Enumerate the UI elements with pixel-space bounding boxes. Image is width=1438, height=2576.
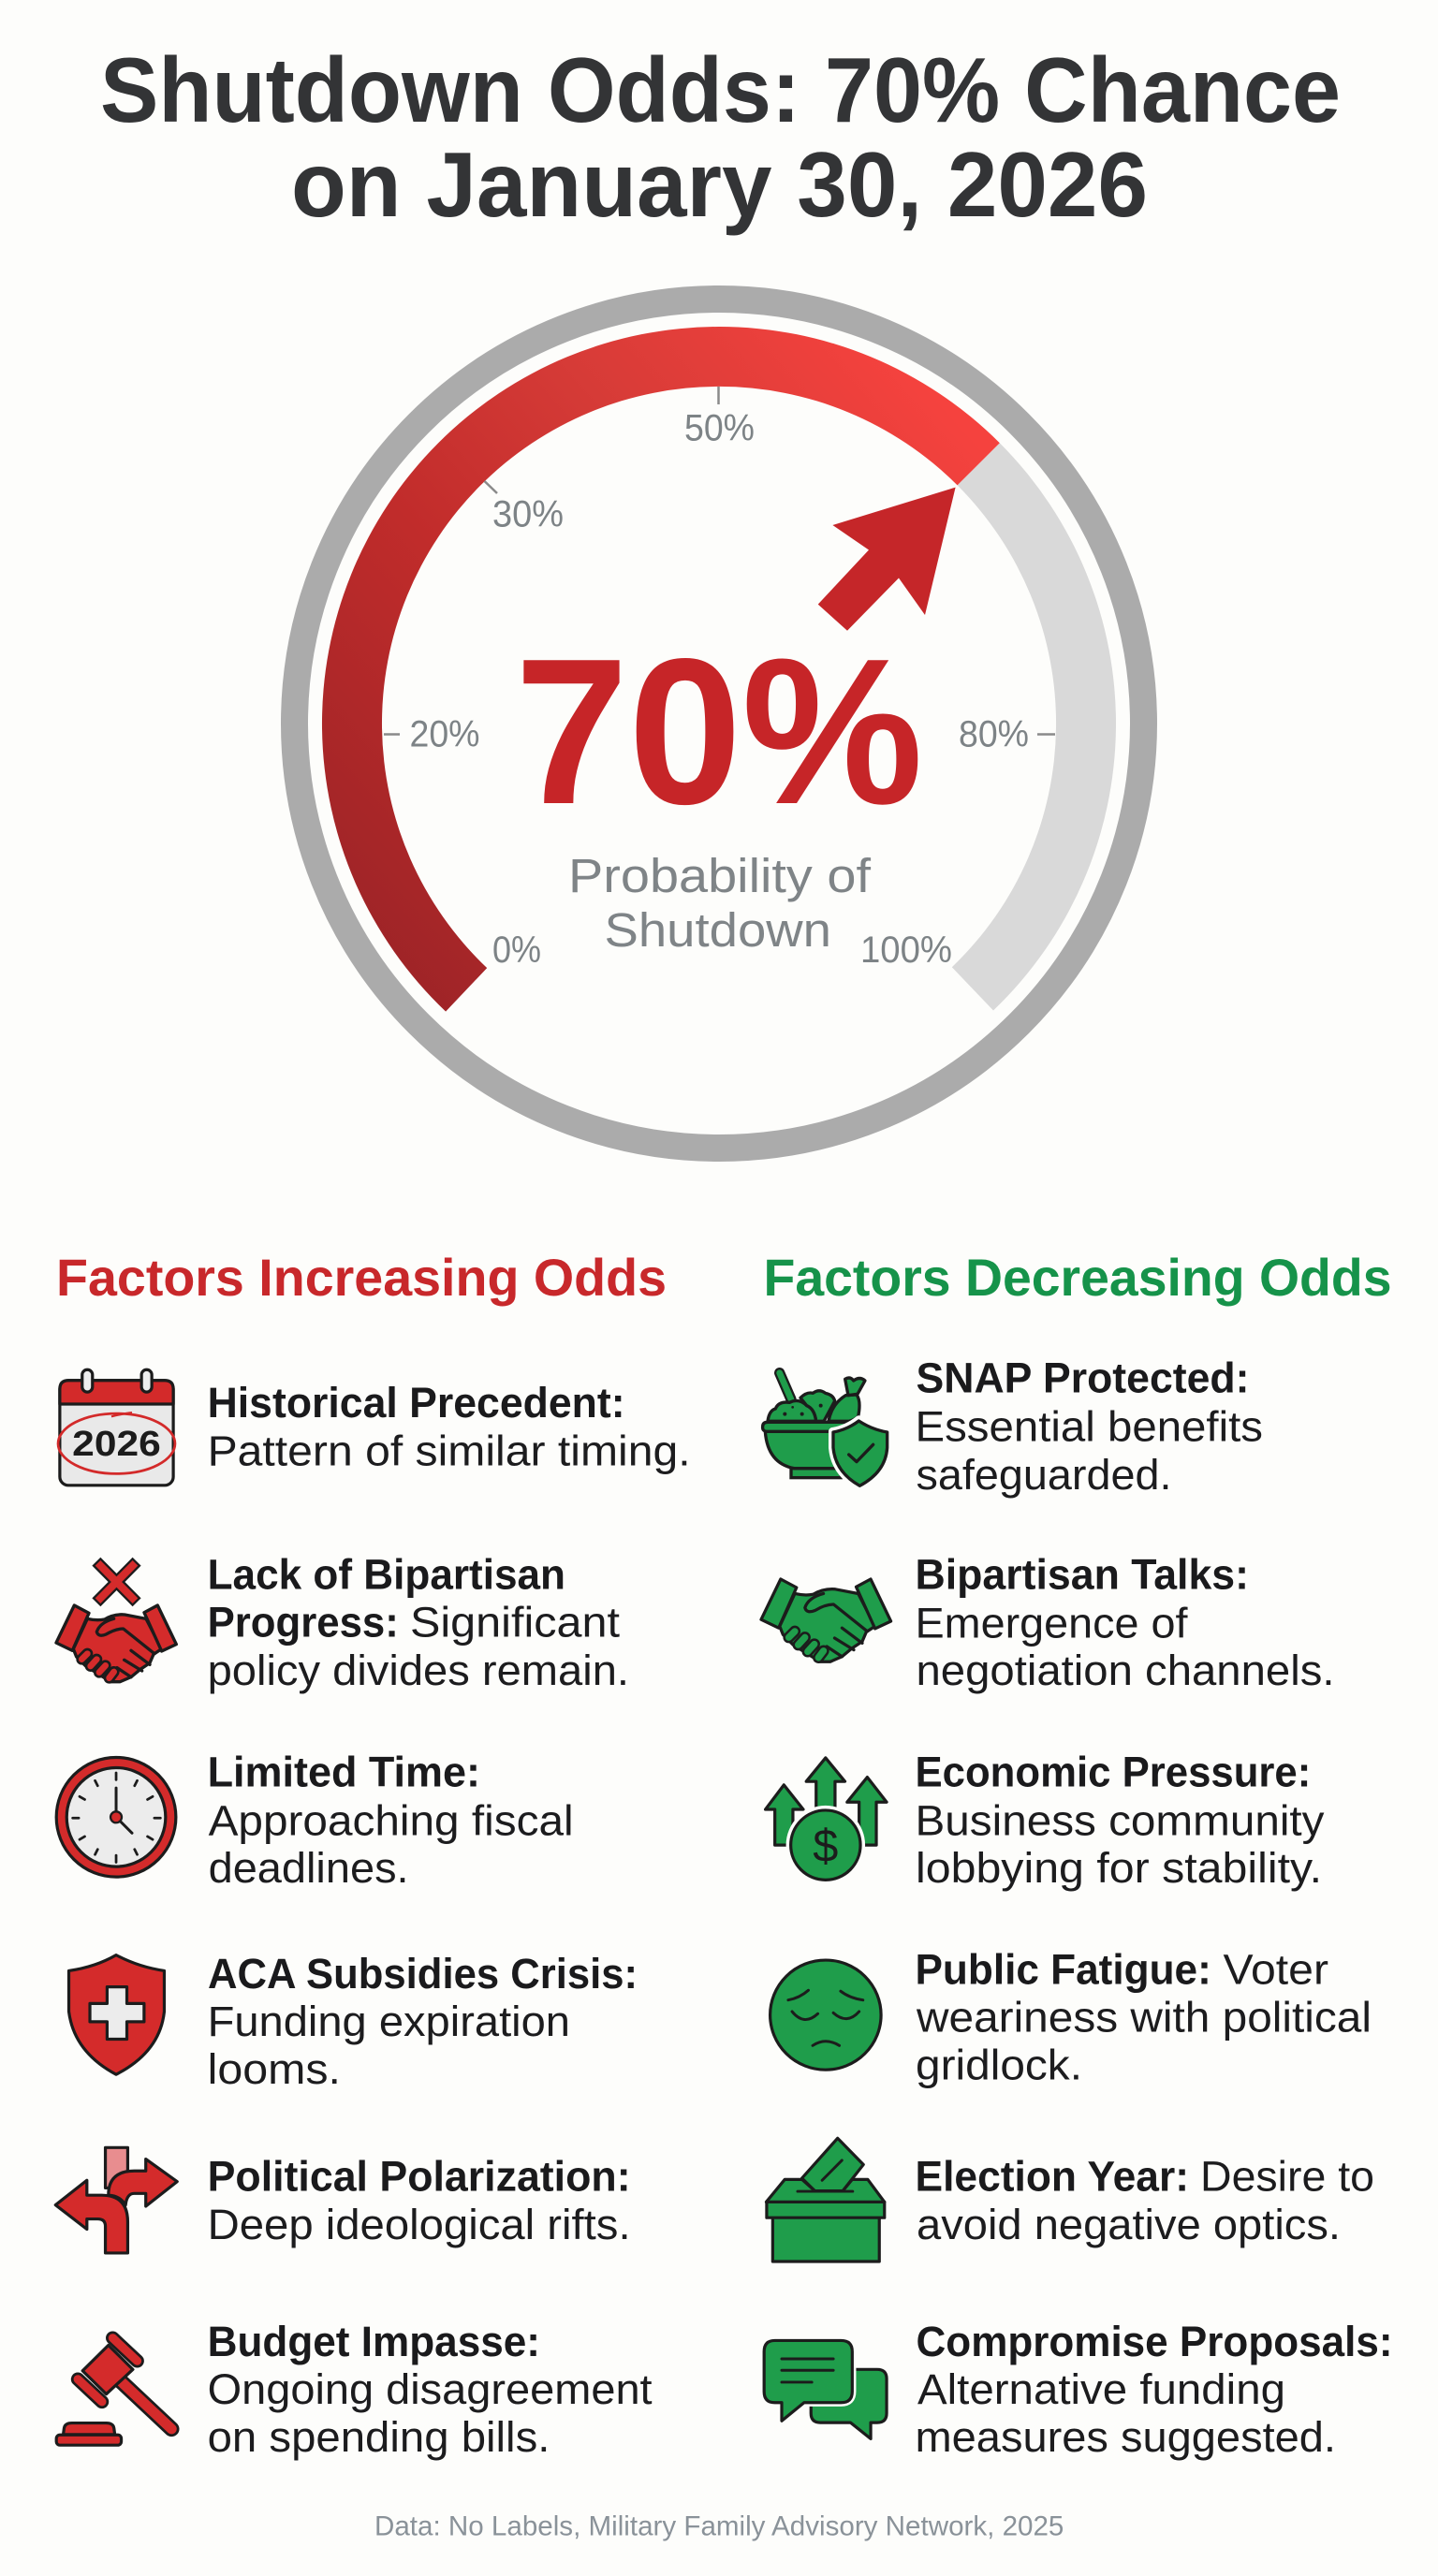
item: economic pressure <box>766 1749 1325 1892</box>
text: compromise proposals <box>916 2318 1393 2461</box>
heading: factors decreasing odds: Factors Decreasing Odds <box>764 1248 1391 1307</box>
scale labels: 50% <box>684 408 755 449</box>
text: election year <box>916 2153 1374 2248</box>
title: on January 30, 2026 <box>291 133 1148 236</box>
text: political polarization: Political Polarization: <box>208 2153 631 2201</box>
text: budget impasse: on spending bills. <box>208 2413 550 2461</box>
text: political polarization <box>208 2153 631 2248</box>
scale labels <box>410 408 1029 971</box>
icon: rising arrows with dollar coin <box>766 1758 887 1884</box>
text: compromise proposals: measures suggested. <box>916 2413 1336 2461</box>
text: aca subsidies crisis <box>208 1950 638 2093</box>
text: compromise proposals: Alternative funding <box>917 2365 1285 2413</box>
icon: calendar 2026: 2026 <box>72 1424 161 1463</box>
title <box>100 38 1341 236</box>
text: aca subsidies crisis: Funding expiration <box>208 1998 570 2045</box>
text: snap protected: Essential benefits <box>916 1402 1263 1451</box>
text: lack of bipartisan progress: Significant <box>410 1598 621 1646</box>
text: bipartisan talks: Emergence of <box>916 1599 1188 1647</box>
text: aca subsidies crisis: ACA Subsidies Crisis: <box>208 1950 638 1998</box>
text: historical precedent: Historical Precedent: <box>208 1379 625 1427</box>
scale ticks <box>384 387 1055 734</box>
gauge red arc 70 percent <box>322 327 1000 1012</box>
text: limited time: Approaching fiscal <box>209 1797 574 1844</box>
gauge outer ring <box>294 300 1144 1148</box>
text: limited time: deadlines. <box>209 1844 409 1892</box>
item: snap protected <box>763 1354 1263 1499</box>
text: election year: avoid negative optics. <box>917 2201 1341 2248</box>
icon: rising arrows with dollar coin: $ <box>813 1822 838 1872</box>
icon: medical shield <box>69 1955 164 2074</box>
text: bipartisan talks: negotiation channels. <box>916 1647 1335 1694</box>
gauge panel <box>294 300 1144 1148</box>
item: budget impasse <box>56 2318 653 2461</box>
text: lack of bipartisan progress: Progress: <box>208 1598 399 1646</box>
scale labels: 0% <box>492 929 541 971</box>
text: election year: Desire to <box>1200 2153 1374 2201</box>
icon: gavel <box>56 2338 171 2445</box>
text: lack of bipartisan progress: policy divides remain. <box>208 1647 629 1694</box>
text: budget impasse <box>208 2318 653 2461</box>
text: limited time: Limited Time: <box>208 1749 480 1796</box>
text: snap protected: SNAP Protected: <box>916 1354 1249 1402</box>
arrow pointing to 70 percent <box>818 488 956 631</box>
text: economic pressure: lobbying for stability. <box>916 1844 1322 1892</box>
text: economic pressure <box>916 1749 1325 1892</box>
item: historical precedent <box>58 1369 691 1486</box>
icon: ballot box <box>766 2138 885 2261</box>
text: bipartisan talks: Bipartisan Talks: <box>916 1550 1249 1598</box>
text: election year: Election Year: <box>916 2153 1189 2201</box>
text: lack of bipartisan progress: Lack of Bipartisan <box>208 1550 565 1598</box>
text: historical precedent <box>208 1379 691 1475</box>
text: political polarization: Deep ideological rifts. <box>208 2201 631 2248</box>
title: Shutdown Odds: 70% Chance <box>100 38 1341 141</box>
big 70 percent value: 70% <box>515 616 923 848</box>
scale labels: 30% <box>492 494 564 535</box>
source footer: Data: No Labels, Military Family Advisory Network, 2025 <box>374 2510 1064 2542</box>
text: public fatigue: Public Fatigue: <box>916 1945 1211 1994</box>
item: compromise proposals <box>764 2318 1393 2461</box>
text: public fatigue: gridlock. <box>916 2042 1082 2089</box>
scale labels: 20% <box>410 713 479 754</box>
text: public fatigue <box>916 1945 1372 2089</box>
heading: factors increasing odds: Factors Increasing Odds <box>56 1248 667 1307</box>
item: lack of bipartisan progress <box>56 1550 629 1694</box>
text: limited time <box>208 1749 574 1892</box>
text: lack of bipartisan progress <box>208 1550 629 1694</box>
item: public fatigue <box>770 1945 1372 2089</box>
text: public fatigue: Voter <box>1223 1945 1328 1994</box>
item: limited time <box>56 1749 574 1892</box>
probability caption: Probability of <box>568 849 872 902</box>
text: snap protected <box>916 1354 1263 1499</box>
probability caption: Shutdown <box>605 903 831 957</box>
item: election year <box>766 2138 1374 2261</box>
scale labels: 80% <box>959 713 1029 754</box>
icon: speech bubbles <box>764 2340 887 2438</box>
probability caption <box>568 849 872 957</box>
icon: handshake <box>761 1579 891 1661</box>
text: budget impasse: Ongoing disagreement <box>208 2365 653 2413</box>
text: budget impasse: Budget Impasse: <box>208 2318 540 2365</box>
text: bipartisan talks <box>916 1550 1335 1694</box>
text: economic pressure: Business community <box>916 1797 1325 1844</box>
text: snap protected: safeguarded. <box>916 1451 1172 1499</box>
icon: food bowl with shield <box>763 1373 888 1486</box>
text: aca subsidies crisis: looms. <box>208 2045 341 2093</box>
item: political polarization <box>55 2147 631 2253</box>
item: aca subsidies crisis <box>69 1950 638 2093</box>
text: compromise proposals: Compromise Proposals: <box>916 2318 1393 2365</box>
panel: factors decreasing odds <box>761 1248 1393 2461</box>
icon: calendar 2026 <box>58 1369 175 1486</box>
gauge remaining grey arc <box>952 443 1116 1011</box>
text: public fatigue: weariness with political <box>916 1993 1372 2041</box>
icon: weary face <box>770 1960 881 2070</box>
icon: diverging arrows <box>55 2147 177 2253</box>
item: bipartisan talks <box>761 1550 1335 1694</box>
text: historical precedent: Pattern of similar timing. <box>208 1427 691 1475</box>
icon: failed handshake <box>56 1566 176 1682</box>
scale labels: 100% <box>860 929 952 971</box>
panel: factors increasing odds <box>55 1248 691 2461</box>
icon: clock <box>56 1757 176 1877</box>
text: economic pressure: Economic Pressure: <box>916 1749 1311 1796</box>
